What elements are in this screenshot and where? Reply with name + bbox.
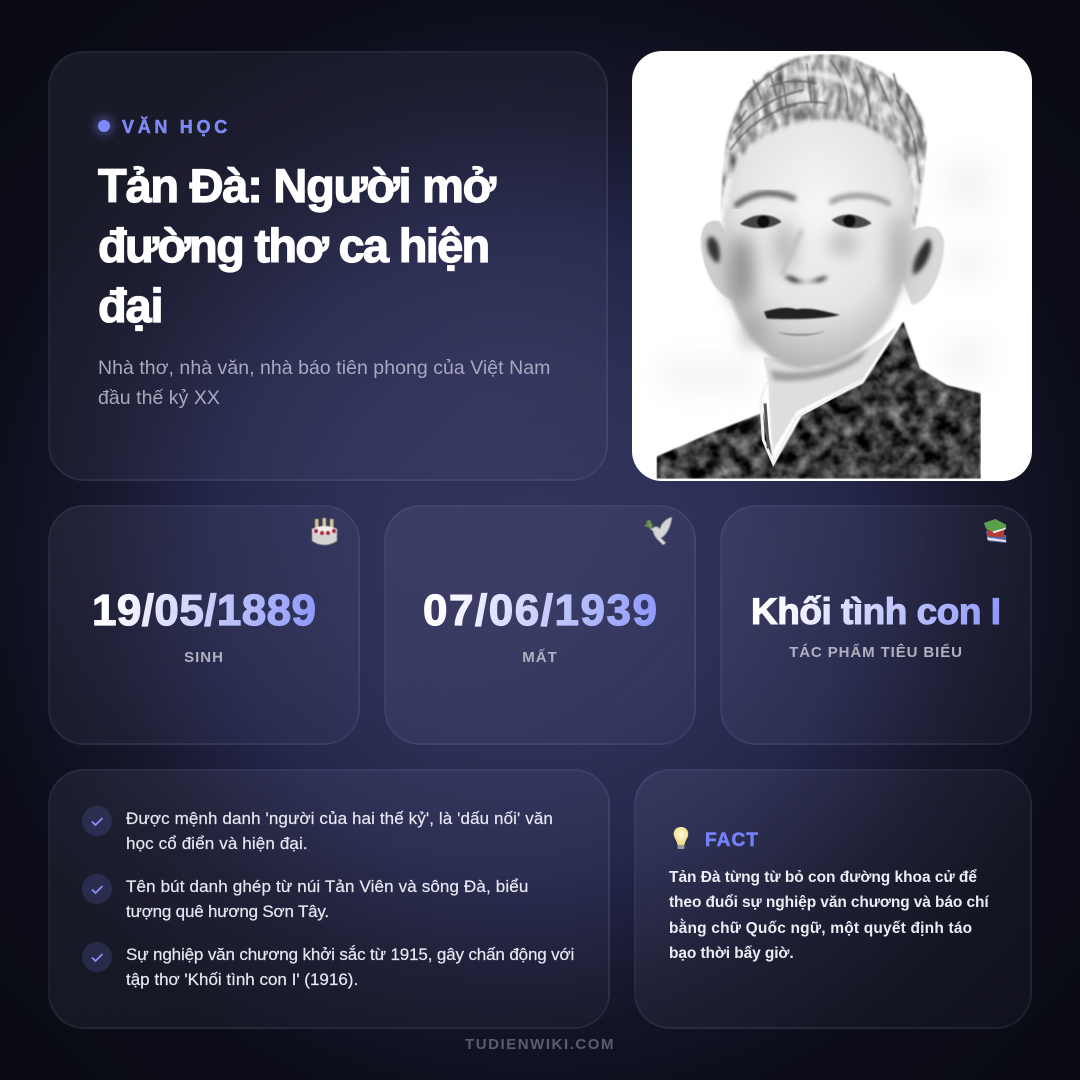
panel: fact: [634, 769, 1032, 1029]
panel: title card: [48, 51, 608, 481]
title: [98, 159, 497, 332]
point 2: tượng quê hương Sơn Tây.: [126, 902, 329, 921]
eyes: [740, 215, 872, 228]
fact text: bạo thời bấy giờ.: [669, 945, 794, 962]
jacket: [657, 322, 981, 479]
hair strands: [730, 60, 923, 183]
brows: [737, 193, 888, 205]
point 2: Tên bút danh ghép từ núi Tản Viên và sông Đà, biểu: [126, 877, 528, 896]
category tag: [90, 112, 231, 140]
work label: TÁC PHẨM TIÊU BIỂU: [789, 644, 963, 661]
notable work value: Khối tình con I: [751, 591, 1001, 632]
birth date value: 19/05/1889: [92, 586, 316, 635]
fact text: theo đuổi sự nghiệp văn chương và báo chí: [669, 894, 989, 911]
neck: [763, 327, 897, 450]
point 2: [126, 877, 528, 921]
title: đường thơ ca hiện: [98, 219, 489, 272]
panel: work stat: [720, 505, 1032, 745]
ears: [701, 221, 737, 300]
nose: [782, 230, 828, 283]
collar: [761, 380, 863, 463]
footer brand: TUDIENWIKI.COM: [465, 1036, 615, 1053]
subtitle: Nhà thơ, nhà văn, nhà báo tiên phong của Việt Nam: [98, 357, 550, 379]
point 3: tập thơ 'Khối tình con I' (1916).: [126, 970, 358, 989]
title: đại: [98, 279, 162, 332]
icon: birthday cake: [311, 517, 338, 546]
icon: dove: [644, 516, 672, 546]
point 1: [126, 809, 553, 853]
death date value: 07/06/1939: [423, 586, 657, 635]
category tag: VĂN HỌC: [122, 117, 231, 137]
mouth: [764, 308, 840, 336]
panel: death stat: [384, 505, 696, 745]
icon: check 1: [82, 806, 112, 836]
hair base: [721, 54, 927, 228]
icon: books: [984, 519, 1006, 543]
title: Tản Đà: Người mở: [98, 159, 495, 212]
fact text: Tản Đà từng từ bỏ con đường khoa cử để: [669, 869, 977, 886]
fact text: [669, 869, 990, 962]
subtitle: [98, 357, 550, 409]
panel: birth stat: [48, 505, 360, 745]
point 3: Sự nghiệp văn chương khởi sắc từ 1915, gây chấn động với: [126, 945, 574, 964]
icon: check 2: [82, 874, 112, 904]
birth label: SINH: [184, 649, 224, 666]
point 1: Được mệnh danh 'người của hai thế kỷ', là 'dấu nối' văn: [126, 809, 553, 828]
icon: light bulb: [674, 827, 688, 849]
panel: key points: [48, 769, 610, 1029]
death label: MẤT: [522, 649, 558, 666]
point 3: [126, 945, 574, 989]
face shading: [730, 213, 907, 347]
fact text: bằng chữ Quốc ngữ, một quyết định táo: [669, 920, 972, 937]
icon: check 3: [82, 942, 112, 972]
faint printed page: [663, 160, 990, 390]
portrait image: [632, 51, 1032, 481]
face: [723, 119, 913, 368]
subtitle: đầu thế kỷ XX: [98, 387, 220, 409]
point 1: học cổ điển và hiện đại.: [126, 834, 308, 853]
fact heading: FACT: [705, 830, 759, 851]
